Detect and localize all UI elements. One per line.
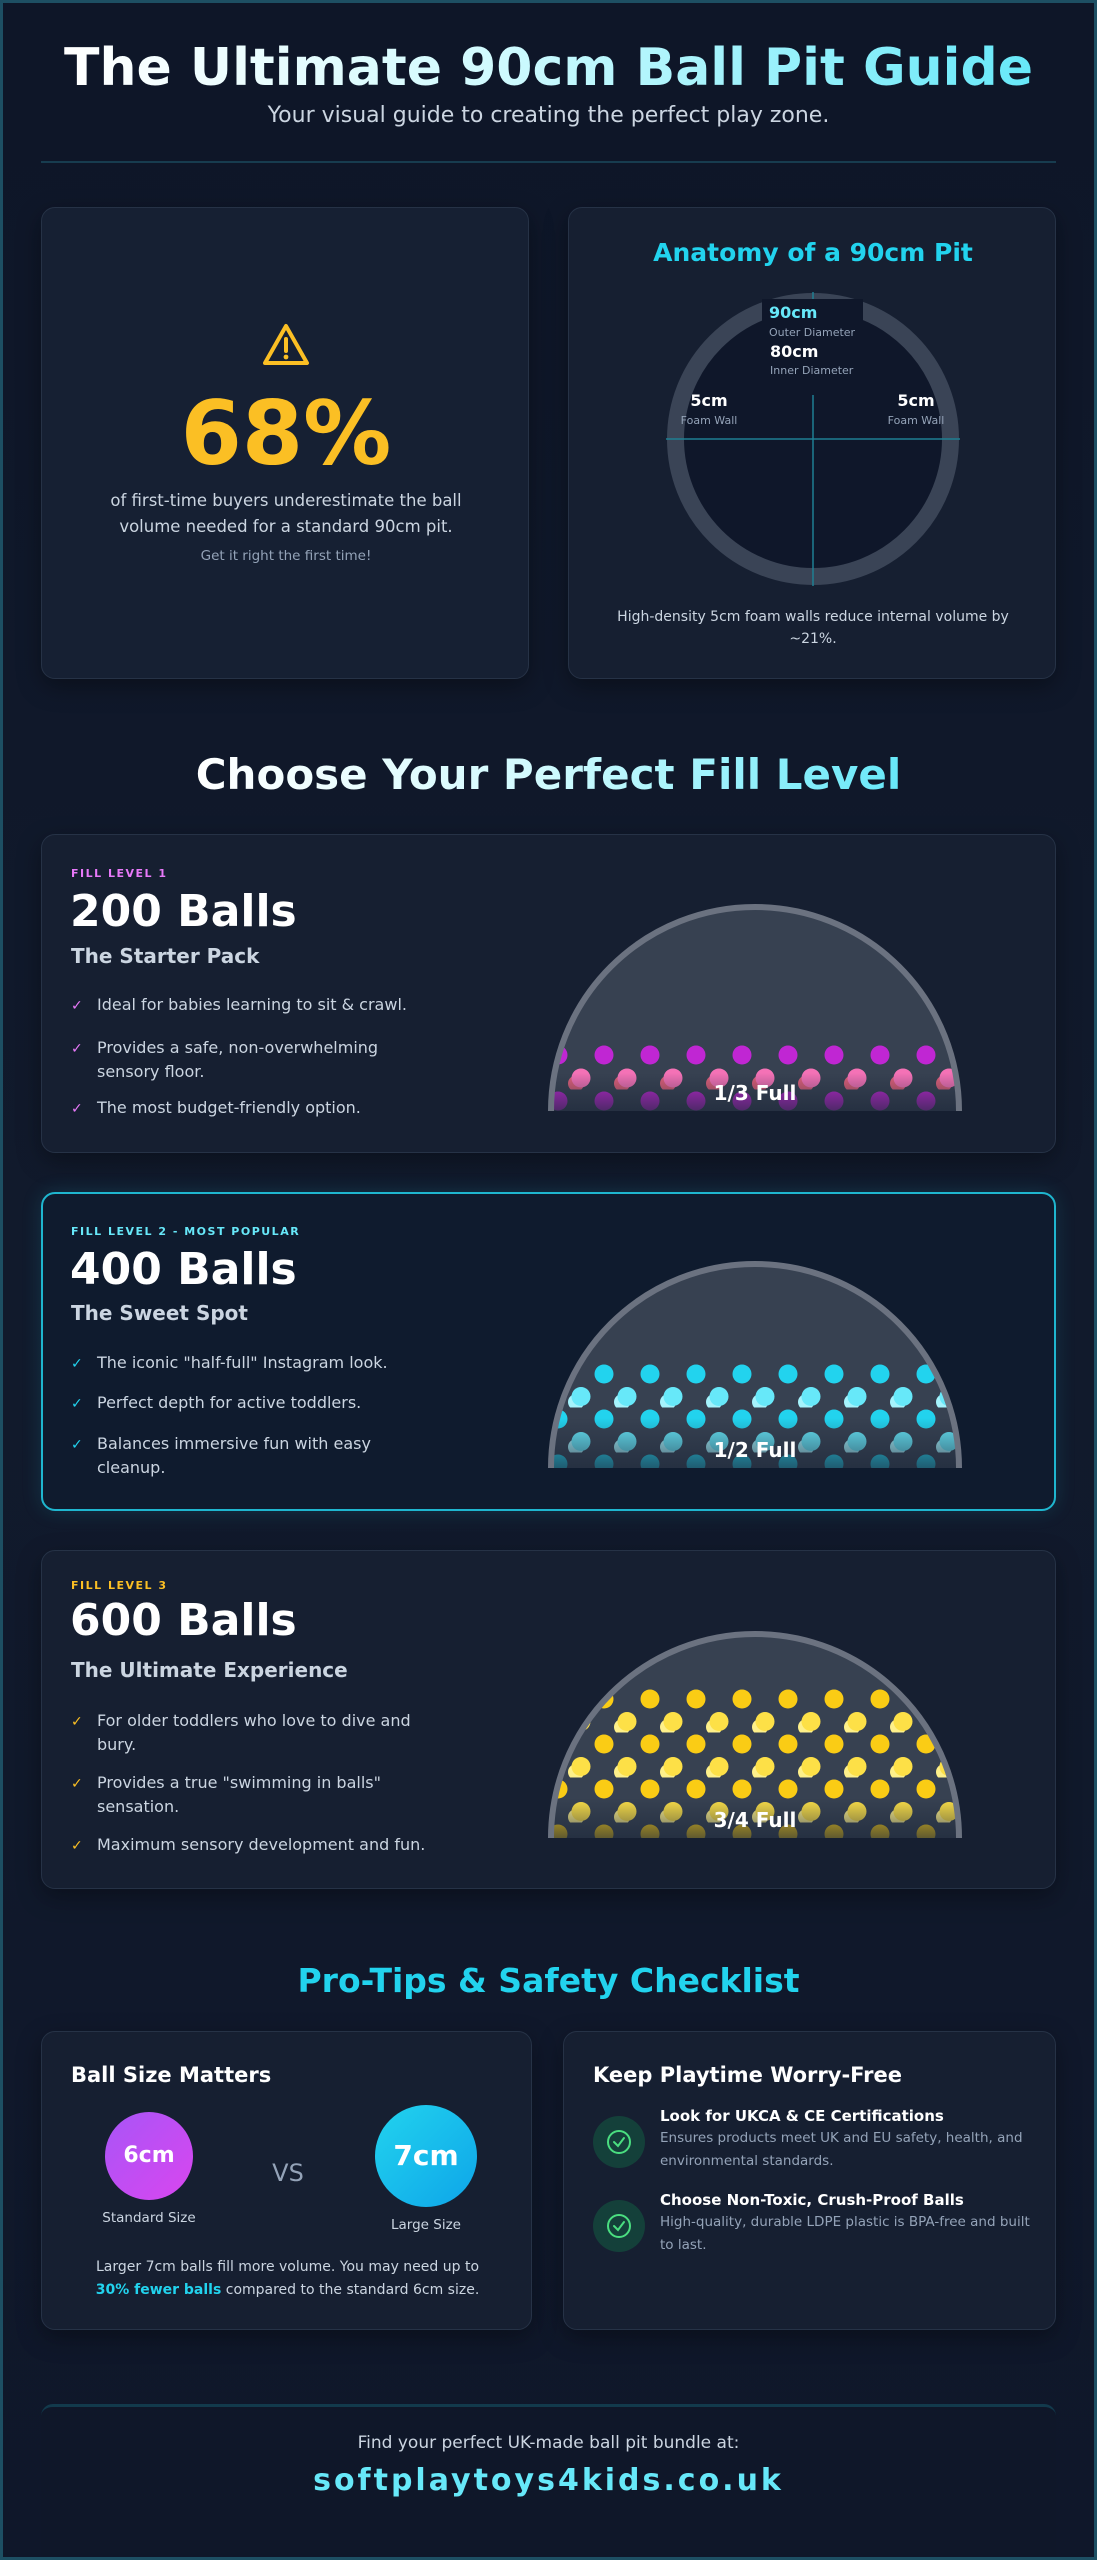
panel: fill level 3: Maximum sensory development and fun. bbox=[97, 1835, 425, 1854]
section heading: fill level: Choose Your Perfect Fill Level bbox=[196, 750, 901, 799]
item: certifications: Ensures products meet UK and EU safety, health, and environmental standards. bbox=[660, 2130, 1023, 2169]
panel: fill level 1: Provides a safe, non-overwhelming sensory floor. bbox=[97, 1038, 378, 1081]
panel: fill level 3 bbox=[41, 1550, 1056, 1889]
icon: 6cm ball: 6cm bbox=[123, 2143, 175, 2168]
panel: fill level 2: The iconic "half-full" Instagram look. bbox=[97, 1353, 388, 1372]
panel: fill level 2: Perfect depth for active toddlers. bbox=[97, 1393, 361, 1412]
bullet list bbox=[71, 1353, 388, 1477]
subtitle: Your visual guide to creating the perfect play zone. bbox=[268, 103, 829, 128]
panel: fill level 2: Balances immersive fun with easy cleanup. bbox=[97, 1434, 371, 1477]
item: certifications: Look for UKCA & CE Certifications bbox=[660, 2107, 944, 2125]
panel: ball size bbox=[41, 2031, 532, 2330]
icon: 7cm ball bbox=[375, 2105, 477, 2207]
icon: warning bbox=[263, 324, 310, 365]
panel: fill level 1 bbox=[41, 834, 1056, 1153]
stat note: Get it right the first time! bbox=[201, 548, 371, 564]
icon: 7cm ball: 7cm bbox=[393, 2139, 459, 2172]
diagram: pit circle: 5cm bbox=[690, 391, 728, 410]
icon: check bbox=[593, 2116, 645, 2168]
panel: fill level 1: ✓ bbox=[71, 998, 83, 1014]
panel: fill level 1: ✓ bbox=[71, 1041, 83, 1057]
footer url: softplaytoys4kids.co.uk bbox=[313, 2463, 784, 2498]
panel: fill level 3: For older toddlers who love to dive and bury. bbox=[97, 1711, 411, 1754]
icon: 6cm ball bbox=[105, 2112, 193, 2200]
chart: pit 1/2 full: 1/2 Full bbox=[714, 1438, 796, 1462]
panel: fill level 2: ✓ bbox=[71, 1396, 83, 1412]
panel: safety bbox=[563, 2031, 1056, 2330]
panel: fill level 3: Provides a true "swimming in balls" sensation. bbox=[97, 1773, 381, 1816]
chart: pit 3/4 full: 3/4 Full bbox=[714, 1808, 796, 1832]
anatomy heading: Anatomy of a 90cm Pit bbox=[653, 238, 973, 267]
label large: Large Size bbox=[391, 2217, 461, 2233]
diagram: pit circle: 5cm bbox=[897, 391, 935, 410]
panel: fill level 2: ✓ bbox=[71, 1437, 83, 1453]
label: FILL LEVEL 1 bbox=[71, 867, 168, 880]
label: FILL LEVEL 2 - MOST POPULAR bbox=[71, 1225, 300, 1238]
vs: VS bbox=[272, 2159, 304, 2187]
diagram: pit circle: Foam Wall bbox=[681, 414, 737, 427]
chart: pit 1/3 full: 1/3 Full bbox=[714, 1081, 796, 1105]
panel: fill level 2: ✓ bbox=[71, 1356, 83, 1372]
panel: anatomy bbox=[568, 207, 1056, 679]
diagram: pit circle: Inner Diameter bbox=[770, 364, 854, 377]
icon: check bbox=[593, 2200, 645, 2252]
footer bbox=[41, 2404, 1056, 2556]
chart: pit 3/4 full bbox=[548, 1631, 962, 1838]
subheading: The Ultimate Experience bbox=[71, 1658, 348, 1682]
heading: 600 Balls bbox=[70, 1595, 297, 1646]
footer text: Find your perfect UK-made ball pit bundle at: bbox=[358, 2433, 739, 2453]
diagram: pit circle bbox=[666, 292, 960, 586]
item: non-toxic bbox=[593, 2191, 1030, 2253]
panel: fill level 2 bbox=[41, 1192, 1056, 1511]
bullet list bbox=[71, 1711, 425, 1854]
item: non-toxic: High-quality, durable LDPE plastic is BPA-free and built to last. bbox=[660, 2214, 1030, 2253]
heading: 400 Balls bbox=[70, 1244, 297, 1295]
diagram: pit circle: 90cm bbox=[769, 303, 817, 322]
anatomy caption: High-density 5cm foam walls reduce internal volume by ~21%. bbox=[617, 609, 1009, 647]
subheading: The Starter Pack bbox=[71, 944, 259, 968]
diagram: pit circle: Outer Diameter bbox=[769, 326, 856, 339]
big number: 68% bbox=[181, 382, 391, 485]
heading: 200 Balls bbox=[70, 886, 297, 937]
bullet list bbox=[71, 995, 407, 1117]
panel: fill level 3: ✓ bbox=[71, 1776, 83, 1792]
panel: fill level 1: Ideal for babies learning to sit & crawl. bbox=[97, 995, 407, 1014]
heading: Keep Playtime Worry-Free bbox=[593, 2063, 902, 2087]
stat text: of first-time buyers underestimate the ball volume needed for a standard 90cm pit. bbox=[110, 491, 462, 536]
item: non-toxic: Choose Non-Toxic, Crush-Proof Balls bbox=[660, 2191, 964, 2209]
chart: pit 1/3 full bbox=[548, 904, 962, 1111]
label: FILL LEVEL 3 bbox=[71, 1579, 168, 1592]
note: Larger 7cm balls fill more volume. You may need up to 30% fewer balls compared to the standard 6cm size. bbox=[96, 2259, 479, 2298]
section heading: pro tips: Pro-Tips & Safety Checklist bbox=[297, 1961, 800, 2000]
subheading: The Sweet Spot bbox=[71, 1301, 248, 1325]
label standard: Standard Size bbox=[102, 2210, 196, 2226]
diagram: pit circle: 80cm bbox=[770, 342, 818, 361]
item: certifications bbox=[593, 2107, 1023, 2169]
panel: fill level 3: ✓ bbox=[71, 1714, 83, 1730]
heading: Ball Size Matters bbox=[71, 2063, 271, 2087]
panel: fill level 3: ✓ bbox=[71, 1838, 83, 1854]
title: The Ultimate 90cm Ball Pit Guide bbox=[64, 38, 1033, 98]
panel: fill level 1: ✓ bbox=[71, 1101, 83, 1117]
panel: fill level 1: The most budget-friendly option. bbox=[97, 1098, 361, 1117]
chart: pit 1/2 full bbox=[548, 1261, 962, 1468]
panel: stat 68% bbox=[41, 207, 529, 679]
diagram: pit circle: Foam Wall bbox=[888, 414, 944, 427]
